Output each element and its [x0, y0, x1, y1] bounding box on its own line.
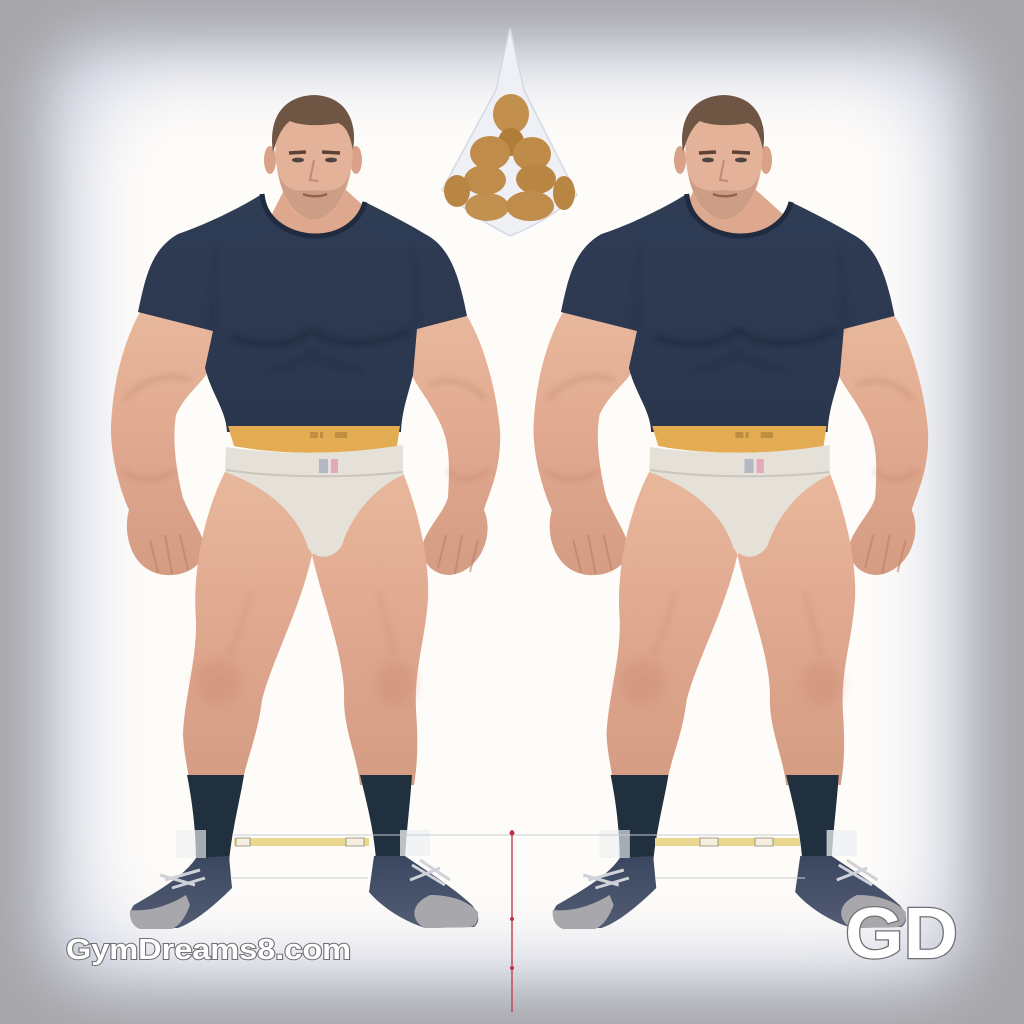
figure: left: [111, 95, 500, 929]
left figure body: [111, 194, 500, 929]
measuring guides: [232, 830, 805, 1012]
watermark: site name: GymDreams8.com: [66, 934, 351, 966]
right figure head: [674, 95, 795, 245]
logo: GD monogram: GD: [845, 894, 958, 974]
figure: right: [533, 95, 928, 929]
right figure body: [533, 194, 928, 929]
icon: net bag of potatoes: [442, 28, 577, 236]
left figure head: [264, 95, 385, 245]
